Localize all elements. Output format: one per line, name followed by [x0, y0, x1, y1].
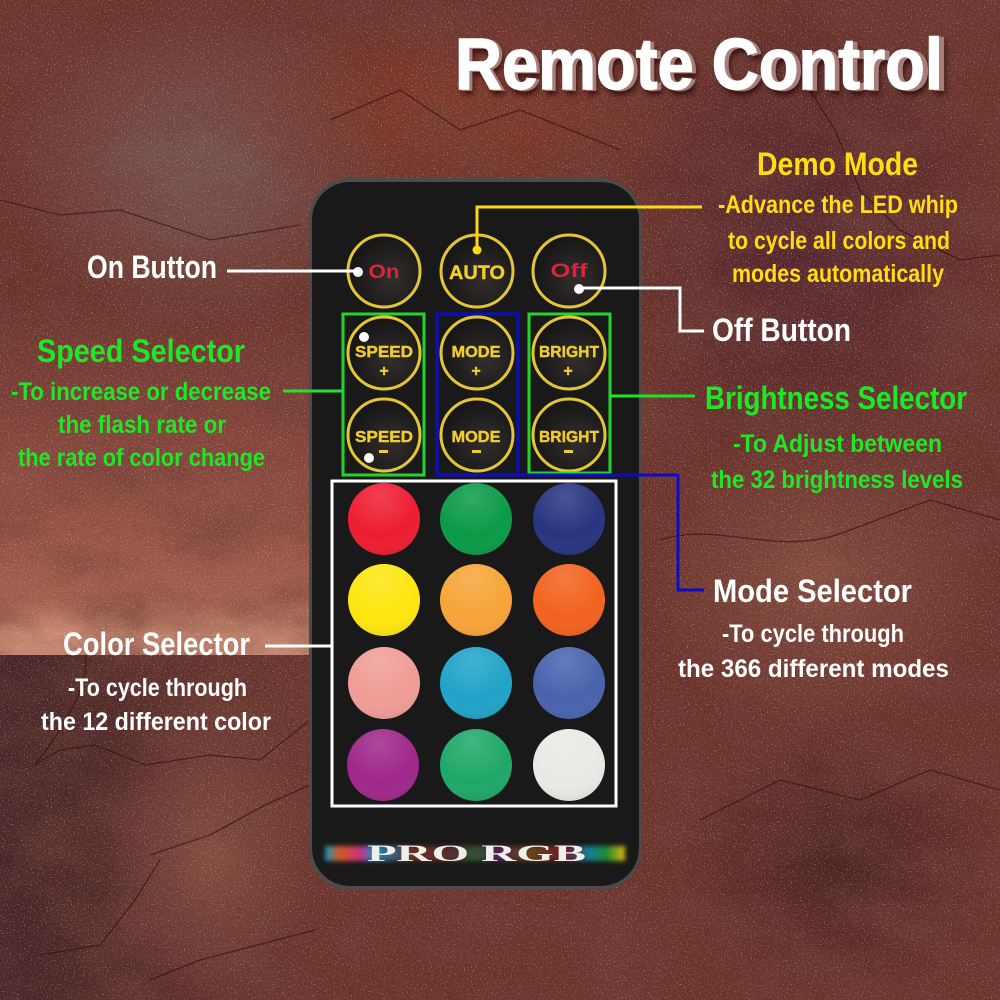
arrow: off button: [574, 284, 704, 331]
selection box: brightness: [529, 314, 610, 473]
arrow: on button: [227, 267, 363, 277]
remote control body: [309, 178, 642, 890]
arrow: color selector: [265, 644, 332, 648]
button: AUTO: AUTO: [449, 263, 505, 284]
title: Remote Control: [455, 25, 943, 105]
button: BRIGHT minus: [533, 399, 605, 471]
text: speed selector: Speed Selector: [37, 333, 245, 369]
arrow: speed selector: [283, 332, 374, 463]
text: speed selector: the rate of color change: [18, 444, 265, 472]
arrow: brightness selector: [610, 394, 695, 398]
text: color selector: -To cycle through: [68, 674, 247, 702]
button: Off: [533, 235, 605, 307]
text: color selector: the 12 different color: [41, 708, 271, 736]
button: MODE plus: +: [471, 363, 481, 380]
button: SPEED plus: +: [379, 363, 389, 380]
label: on button: On Button: [87, 249, 217, 285]
button: BRIGHT plus: BRIGHT: [539, 344, 599, 361]
button: SPEED minus: [348, 399, 420, 471]
button: BRIGHT plus: [533, 317, 605, 389]
button: MODE minus: [441, 399, 513, 471]
button: SPEED minus: SPEED: [355, 429, 413, 446]
button: BRIGHT minus: BRIGHT: [539, 429, 599, 446]
selection box: speed: [343, 314, 424, 475]
button: MODE plus: MODE: [452, 344, 501, 361]
brand logo: PRO RGB: [367, 841, 586, 866]
button: BRIGHT plus: +: [563, 363, 573, 380]
title: Remote Control: [458, 26, 948, 106]
text: color selector: [41, 626, 271, 736]
selection box: mode: [437, 314, 518, 475]
button: SPEED plus: SPEED: [355, 344, 413, 361]
button: Off: Off: [550, 261, 588, 282]
arrow: demo mode: [472, 207, 702, 254]
text: mode selector: the 366 different modes: [678, 655, 949, 683]
button: On: [348, 235, 420, 307]
text: demo mode: Demo Mode: [757, 146, 918, 182]
text: mode selector: [678, 573, 949, 683]
text: demo mode: modes automatically: [732, 260, 944, 288]
color button grid: [347, 483, 605, 801]
text: color selector: Color Selector: [63, 626, 250, 662]
label: off button: Off Button: [712, 312, 851, 348]
text: mode selector: Mode Selector: [713, 573, 912, 609]
selection box: color: [332, 481, 616, 806]
arrow: mode selector: [518, 475, 704, 590]
button: On: On: [368, 262, 400, 283]
button: MODE plus: [441, 317, 513, 389]
text: speed selector: the flash rate or: [58, 411, 226, 439]
button: SPEED plus: [348, 317, 420, 389]
text: mode selector: -To cycle through: [722, 620, 904, 648]
button: MODE minus: MODE: [452, 429, 501, 446]
text: demo mode: -Advance the LED whip: [718, 191, 958, 219]
text: speed selector: [11, 333, 271, 472]
text: demo mode: to cycle all colors and: [728, 227, 950, 255]
text: speed selector: -To increase or decrease: [11, 378, 271, 406]
text: brightness selector: -To Adjust between: [733, 430, 942, 458]
text: brightness selector: [705, 380, 967, 494]
rainbow light strip: [325, 846, 625, 861]
button: AUTO: [441, 235, 513, 307]
text: brightness selector: the 32 brightness levels: [711, 466, 963, 494]
text: brightness selector: Brightness Selector: [705, 380, 967, 416]
text: demo mode: [718, 146, 958, 288]
